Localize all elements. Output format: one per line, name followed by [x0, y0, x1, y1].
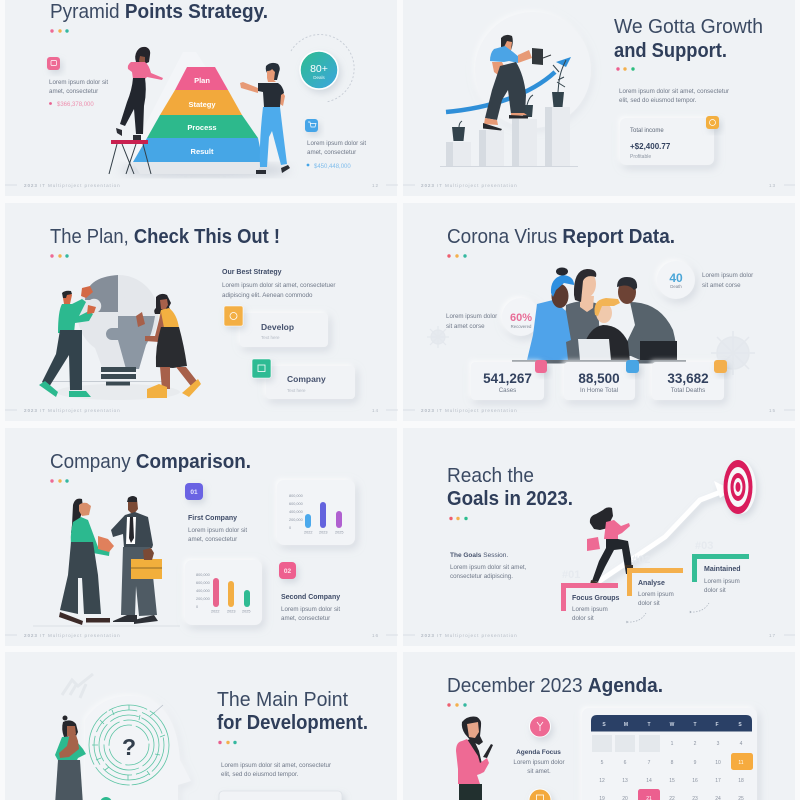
- calendar dates: 7: [648, 760, 651, 766]
- calendar dates: [599, 741, 744, 800]
- text block: [619, 88, 729, 104]
- panel: pyramid points strategy: [5, 0, 398, 196]
- title: corona: Corona Virus Report Data.: [447, 226, 675, 248]
- bar chart: first company: 2023: [319, 530, 327, 534]
- panel: main point for development: [5, 652, 397, 800]
- text block: agenda focus: sit amet.: [527, 768, 551, 775]
- title: goals: Reach the: [447, 465, 534, 487]
- calendar header: T: [693, 722, 697, 728]
- card: total income: [620, 116, 719, 165]
- footer: 17: [769, 633, 776, 638]
- footer: 2023 IT Multiproject presentation: [24, 183, 121, 188]
- footer: 2023 IT Multiproject presentation: [421, 183, 518, 188]
- card: develop: [224, 306, 328, 347]
- bar chart: first company: 800,000: [289, 494, 303, 498]
- stat circle: 80+ deals: Deals: [313, 75, 325, 80]
- question mark: ?: [122, 734, 136, 760]
- title: comparison: Company Comparison.: [50, 451, 251, 473]
- card: total income: Profitable: [630, 154, 651, 160]
- panel: corona virus report: [403, 203, 795, 421]
- text block: first company: amet, consectetur: [188, 536, 237, 543]
- card: company: [252, 359, 355, 399]
- text block: second company: [281, 594, 340, 622]
- bar chart: second company: [185, 560, 262, 625]
- footer: [5, 633, 398, 638]
- stat circle: 60 percent recovered: Recovered: [511, 324, 532, 329]
- text block: Lorem ipsum dolor sit amet, consectetur: [221, 762, 331, 769]
- title: main point: The Main Point: [217, 689, 348, 711]
- card: total deaths: Total Deaths: [671, 387, 705, 394]
- card: cases: [471, 360, 547, 400]
- calendar dates: 13: [622, 778, 628, 784]
- calendar dates: 14: [646, 778, 652, 784]
- bar chart: second company: 800,000: [196, 573, 210, 577]
- text block: goals session: consectetur adipiscing.: [450, 573, 513, 580]
- card: develop: Text here: [261, 335, 280, 340]
- text block: agenda focus: Lorem ipsum dolor: [513, 759, 565, 766]
- accent dots: [616, 67, 635, 71]
- step: focus groups: [561, 569, 620, 622]
- calendar header: F: [715, 722, 719, 728]
- growth arrow: [446, 57, 571, 112]
- panel: december agenda: [403, 652, 795, 800]
- calendar dates: 10: [715, 760, 721, 766]
- decorative neumorphic circle: [475, 12, 591, 128]
- virus decoration large: [711, 331, 755, 375]
- accent dots: [447, 703, 467, 707]
- step: maintained: #03: [695, 540, 713, 552]
- text block: elit, sed do eiusmod tempor.: [221, 771, 299, 778]
- calendar dates: 9: [694, 760, 697, 766]
- icon: badge 01: [185, 483, 203, 500]
- title: pyramid: Pyramid Points Strategy.: [50, 1, 268, 23]
- footer: [403, 183, 795, 188]
- footer: 13: [769, 183, 776, 188]
- panel: growth and support: [403, 0, 795, 196]
- text block: best strategy: Our Best Strategy: [222, 269, 282, 276]
- calendar header: S: [602, 722, 606, 728]
- highlighted date 11: 11: [738, 760, 744, 766]
- stat circle: 80+ deals: [291, 35, 354, 102]
- calendar dates: 5: [601, 760, 604, 766]
- step: focus groups: Focus Groups: [572, 595, 620, 602]
- text block: right note: $450,448,000: [314, 164, 351, 170]
- title: agenda: December 2023 Agenda.: [447, 675, 663, 697]
- text block: first company: First Company: [188, 515, 237, 522]
- head silhouette: [85, 696, 191, 800]
- stat circle: 80+ deals: 80+: [310, 63, 328, 75]
- icon: blue cart badge: [305, 119, 318, 132]
- title: growth: [614, 16, 763, 62]
- icon: badge 02: 02: [284, 568, 291, 575]
- step: maintained: [692, 540, 749, 594]
- calendar header: M: [624, 722, 628, 728]
- text block: left note: Lorem ipsum dolor sit: [49, 79, 108, 86]
- bar chart: first company: 0: [289, 526, 291, 530]
- laptop: [578, 339, 611, 360]
- blonde woman at laptop: [584, 298, 630, 362]
- man in grey at back: [564, 269, 601, 360]
- bar chart: first company: [277, 480, 355, 545]
- illustration: man in black shirt: [240, 63, 290, 174]
- title: goals: [447, 465, 573, 510]
- highlighted date 11: [731, 753, 753, 770]
- green node partially cropped: [100, 797, 112, 800]
- icon: pink badge: [47, 57, 60, 70]
- step: analyse: [627, 554, 683, 607]
- title: main point: [217, 689, 368, 734]
- text block: [221, 762, 331, 778]
- card: in home total: [564, 360, 639, 400]
- text block: second company: Lorem ipsum dolor sit: [281, 606, 340, 613]
- illustration: puzzle light bulb: [50, 275, 180, 400]
- illustration: gardener: [483, 35, 551, 130]
- calendar dates: 15: [669, 778, 675, 784]
- card: total income: Total income: [630, 128, 664, 134]
- step: maintained: Maintained: [704, 566, 741, 573]
- calendar dates: 12: [599, 778, 605, 784]
- bar chart: second company: 0: [196, 605, 198, 609]
- accent dots: [218, 741, 237, 744]
- text block: agenda focus: [513, 749, 565, 775]
- accent dots: [50, 479, 69, 483]
- text block: first company: Lorem ipsum dolor sit: [188, 527, 247, 534]
- bar chart: second company: 400,000: [196, 589, 210, 593]
- text blocks: virus notes: sit amet corse: [702, 282, 741, 289]
- calendar header: T: [647, 722, 651, 728]
- text block: agenda focus: Agenda Focus: [516, 749, 561, 756]
- illustration: woman with tablet: [456, 717, 493, 800]
- card: cases: 541,267: [483, 371, 532, 386]
- calendar header: S: [738, 722, 742, 728]
- step: analyse: #02: [632, 554, 650, 566]
- text block: elit, sed do eiusmod tempor.: [619, 97, 697, 104]
- dashed path markers: [626, 603, 709, 623]
- calendar dates: 4: [740, 741, 743, 747]
- text block: best strategy: adipiscing elit. Aenean commodo: [222, 292, 313, 299]
- decorative chart arrow: [62, 674, 93, 698]
- illustration: woman in yellow: [136, 294, 201, 398]
- calendar dates: 6: [624, 760, 627, 766]
- calendar dates: 18: [738, 778, 744, 784]
- stat circle: 60 percent recovered: 60%: [510, 312, 532, 324]
- text block: left note: amet, consectetur: [49, 88, 98, 95]
- illustration: thinking woman: [55, 716, 86, 800]
- footer: [403, 408, 795, 413]
- text blocks: virus notes: Lorem ipsum dolor: [702, 272, 753, 279]
- title: growth: and Support.: [614, 40, 727, 62]
- text block: goals session: The Goals Session.: [450, 552, 508, 559]
- card: total deaths: 33,682: [667, 371, 709, 386]
- text block: left note: [49, 79, 108, 108]
- accent dots: [449, 517, 468, 520]
- text block: right note: [307, 140, 366, 170]
- text block: second company: amet, consectetur: [281, 615, 330, 622]
- target icon: [724, 460, 756, 514]
- card: total deaths: [652, 360, 727, 400]
- pyramid chart: [120, 52, 290, 177]
- illustration: team at laptop: [512, 268, 686, 364]
- footer: 15: [769, 408, 776, 413]
- illustration: plant pots: [452, 60, 566, 141]
- bar chart: first company: 2025: [335, 530, 343, 534]
- bar chart: first company: 200,000: [289, 518, 303, 522]
- card: develop: Develop: [261, 322, 294, 332]
- bar chart: second company: 2025: [242, 610, 250, 614]
- illustration: woman on stool: [109, 47, 163, 174]
- panel: the plan: [5, 203, 398, 421]
- highlighted date 21: [638, 789, 660, 800]
- text blocks: virus notes: [446, 272, 753, 330]
- bar chart: second company: 2023: [227, 610, 235, 614]
- title: main point: for Development.: [217, 712, 368, 734]
- woman with blue headwrap: [527, 268, 574, 360]
- card: company: Company: [287, 374, 326, 384]
- footer: 16: [372, 633, 379, 638]
- text block: right note: Lorem ipsum dolor sit: [307, 140, 366, 147]
- icon: badge 01: 01: [190, 489, 198, 496]
- text block: first company: [188, 515, 247, 543]
- step: maintained: dolor sit: [704, 587, 726, 594]
- step: focus groups: Lorem ipsum: [572, 606, 608, 613]
- text blocks: virus notes: Lorem ipsum dolor: [446, 313, 497, 320]
- panel: company comparison: [5, 428, 398, 646]
- calendar header: W: [670, 722, 675, 728]
- card: in home total: In Home Total: [580, 387, 618, 394]
- text block: Lorem ipsum dolor sit amet, consectetur: [619, 88, 729, 95]
- icon: badge 02: [279, 562, 296, 579]
- bar chart: second company: 2022: [211, 610, 219, 614]
- calendar dates: 16: [692, 778, 698, 784]
- text block: goals session: [450, 552, 527, 580]
- text block: goals session: Lorem ipsum dolor sit amet,: [450, 564, 527, 571]
- bar chart: first company: 400,000: [289, 510, 303, 514]
- step: analyse: Lorem ipsum: [638, 591, 674, 598]
- text block: best strategy: Lorem ipsum dolor sit amet, consectetuer: [222, 282, 336, 289]
- card: in home total: 88,500: [578, 371, 620, 386]
- text block: best strategy: [222, 269, 336, 299]
- stat circle: 40 death: [657, 261, 695, 299]
- pyramid chart: Plan: [194, 76, 210, 85]
- step: focus groups: #01: [562, 569, 580, 581]
- step: maintained: Lorem ipsum: [704, 578, 740, 585]
- title: plan: The Plan, Check This Out !: [50, 226, 280, 248]
- icon: agenda focus: [530, 716, 550, 737]
- step: focus groups: dolor sit: [572, 615, 594, 622]
- footer: 2023 IT Multiproject presentation: [24, 633, 121, 638]
- footer: 14: [372, 408, 379, 413]
- text block: second company: Second Company: [281, 594, 340, 601]
- bar chart: second company: 200,000: [196, 597, 210, 601]
- calendar dates: 1: [671, 741, 674, 747]
- footer: 2023 IT Multiproject presentation: [421, 633, 518, 638]
- calendar dates: 17: [715, 778, 721, 784]
- bar steps: [440, 107, 578, 166]
- accent dots: [447, 254, 467, 258]
- bar chart: first company: 2022: [304, 530, 312, 534]
- illustration: handshake: [33, 496, 180, 626]
- card cropped: [219, 791, 342, 800]
- step: analyse: dolor sit: [638, 600, 660, 607]
- calendar dates: 2: [694, 741, 697, 747]
- pyramid chart: Result: [191, 147, 214, 156]
- virus decoration small: [427, 326, 449, 348]
- maze: [89, 705, 169, 785]
- footer: [403, 633, 795, 638]
- text block: left note: $366,378,000: [57, 102, 94, 108]
- table edge: [512, 360, 686, 364]
- stat circle: 40 death: 40: [669, 271, 683, 285]
- illustration: man in green: [39, 286, 96, 397]
- accent dots: [50, 254, 69, 258]
- step: analyse: Analyse: [638, 580, 665, 587]
- panel: reach the goals: [403, 428, 795, 646]
- footer: 2023 IT Multiproject presentation: [24, 408, 121, 413]
- calendar header: [591, 715, 752, 732]
- bar chart: first company: 600,000: [289, 502, 303, 506]
- text block: right note: amet, consectetur: [307, 149, 356, 156]
- footer: 2023 IT Multiproject presentation: [421, 408, 518, 413]
- stat circle: 40 death: Death: [670, 284, 682, 289]
- card: company: Text here: [287, 388, 306, 393]
- card: total income: +$2,400.77: [630, 142, 671, 151]
- footer: [5, 183, 398, 188]
- calendar dates: 8: [671, 760, 674, 766]
- stat circle: 60 percent recovered: [502, 298, 540, 336]
- icon: orange agenda: [529, 789, 551, 800]
- calendar empty cells: [592, 735, 660, 752]
- pyramid chart: Stategy: [188, 100, 216, 109]
- text blocks: virus notes: sit amet corse: [446, 323, 485, 330]
- pyramid chart: Process: [187, 123, 217, 132]
- white growth arrow: [598, 481, 732, 582]
- man in sweater on right: [613, 277, 677, 360]
- illustration: running woman: [587, 507, 633, 585]
- title: goals: Goals in 2023.: [447, 488, 573, 510]
- calendar: [582, 708, 757, 800]
- title: growth: We Gotta Growth: [614, 16, 763, 38]
- bar chart: second company: 600,000: [196, 581, 210, 585]
- calendar dates: 3: [717, 741, 720, 747]
- card: cases: Cases: [499, 387, 516, 394]
- footer: 12: [372, 183, 379, 188]
- footer: [5, 408, 398, 413]
- accent dots: [50, 29, 69, 33]
